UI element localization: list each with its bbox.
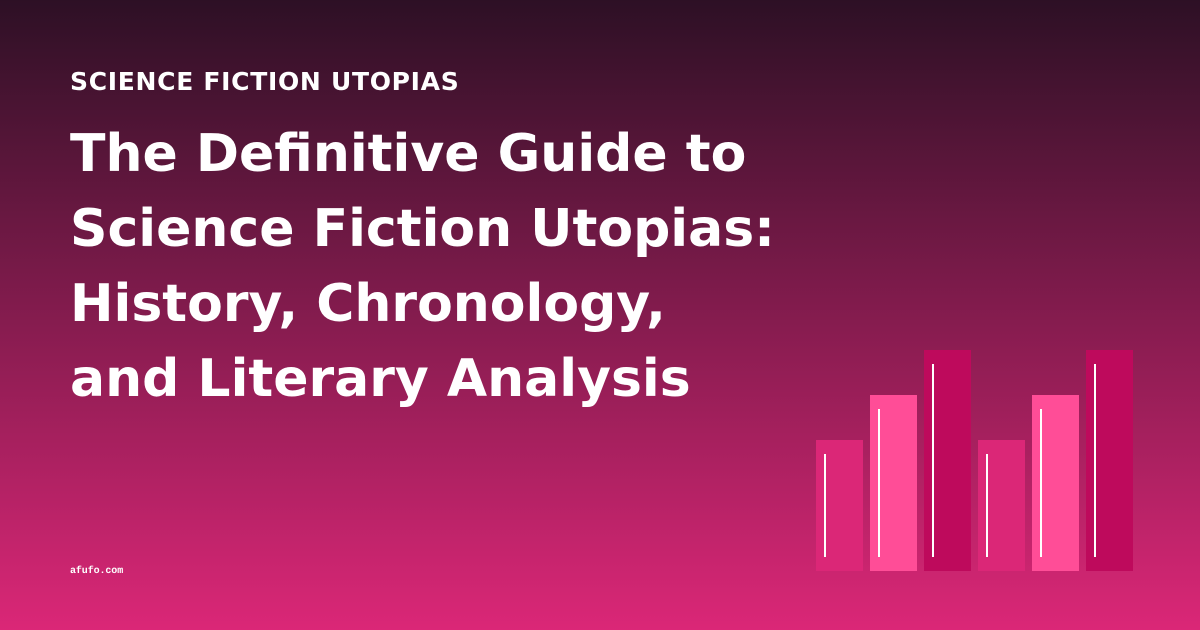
title (70, 124, 775, 409)
eyebrow heading: SCIENCE FICTION UTOPIAS (70, 67, 459, 96)
bar 3 (924, 350, 971, 571)
bar 1 (816, 440, 863, 571)
bar chart decoration (816, 350, 1133, 571)
title: and Literary Analysis (70, 349, 691, 409)
title: The Definitive Guide to (70, 124, 746, 184)
bar 6 (1086, 350, 1133, 571)
footer domain: afufo.com (70, 566, 123, 577)
title: Science Fiction Utopias: (70, 199, 775, 259)
bar 5 (1032, 395, 1079, 571)
bar 2 (870, 395, 917, 571)
title: History, Chronology, (70, 274, 666, 334)
bar 4 (978, 440, 1025, 571)
